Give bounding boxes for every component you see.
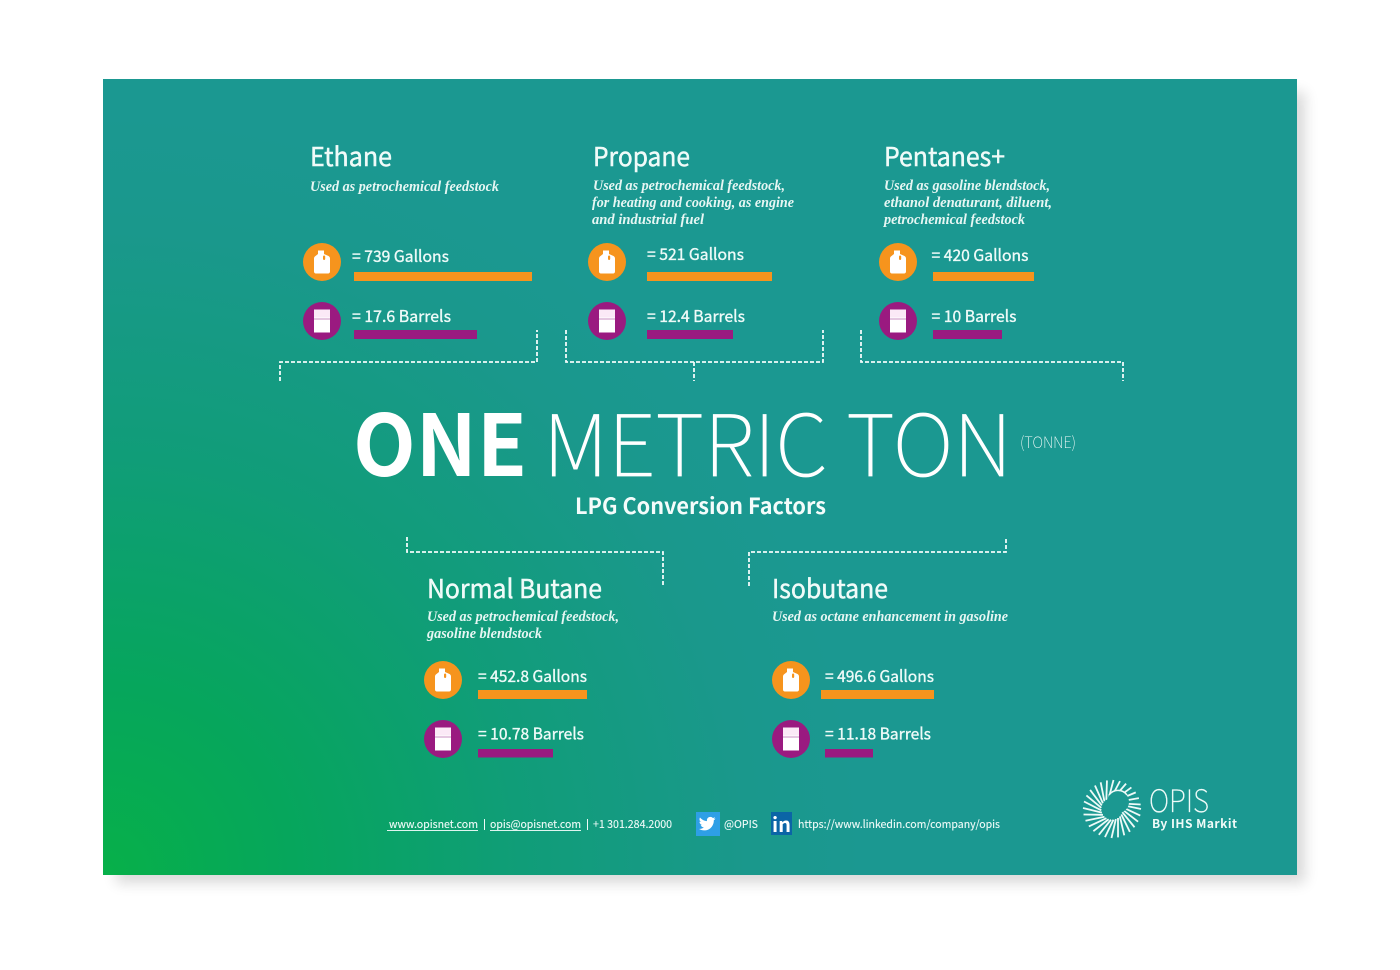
description: Propane: and industrial fuel <box>592 212 704 228</box>
description: Propane: for heating and cooking, as engine <box>592 195 795 211</box>
title: (TONNE) <box>1020 429 1076 453</box>
footer: contact details: www.opisnet.com <box>389 816 478 832</box>
panel: Ethane <box>303 137 532 340</box>
bar: barrels <box>478 749 553 758</box>
bar: gallons <box>354 272 532 281</box>
description: Pentanes+: ethanol denaturant, diluent, <box>884 195 1052 211</box>
description: Normal Butane: gasoline blendstock <box>426 626 543 642</box>
value: gallons: = 496.6 Gallons <box>825 663 934 687</box>
icon: barrel <box>588 302 626 340</box>
value: gallons: = 420 Gallons <box>932 242 1028 266</box>
description: Isobutane: Used as octane enhancement in gasoline <box>772 609 1009 625</box>
heading: Isobutane: Isobutane <box>772 569 888 606</box>
bar: barrels <box>933 330 1002 339</box>
title <box>353 378 1076 501</box>
value: barrels: = 12.4 Barrels <box>647 303 745 327</box>
logo: OPIS by IHS Markit <box>1083 776 1237 838</box>
heading: Normal Butane: Normal Butane <box>427 569 602 606</box>
bar: barrels <box>825 749 873 758</box>
title: ONE <box>353 378 527 501</box>
bracket: upper connectors <box>280 330 1123 381</box>
text: linkedin url: https://www.linkedin.com/company/opis <box>798 816 1000 832</box>
icon: barrel <box>879 302 917 340</box>
bar: gallons <box>478 690 587 699</box>
bracket: lower connectors <box>407 537 1006 586</box>
panel: Normal Butane <box>424 569 619 758</box>
value: gallons: = 452.8 Gallons <box>478 663 587 687</box>
heading: Ethane: Ethane <box>310 137 392 174</box>
bar: barrels <box>647 330 733 339</box>
icon: linkedin: in <box>772 809 791 838</box>
panel: Propane <box>588 137 795 340</box>
value: gallons: = 739 Gallons <box>352 243 449 267</box>
panel shadow <box>116 92 1305 883</box>
logo text: OPIS: OPIS <box>1149 776 1209 821</box>
icon: gallon jug <box>879 243 917 281</box>
value: barrels: = 10 Barrels <box>932 303 1016 327</box>
footer: contact details: +1 301.284.2000 <box>593 816 672 832</box>
value: gallons: = 521 Gallons <box>647 241 744 265</box>
description: Normal Butane: Used as petrochemical feedstock, <box>427 609 619 625</box>
logo mark: sunburst <box>1083 780 1141 838</box>
heading: Pentanes+: Pentanes+ <box>884 137 1005 174</box>
description: Pentanes+ <box>882 178 1052 228</box>
icon: gallon jug <box>424 661 462 699</box>
icon: barrel <box>424 720 462 758</box>
logo text: By IHS Markit: By IHS Markit <box>1152 815 1237 832</box>
bar: gallons <box>647 272 772 281</box>
text: twitter handle: @OPIS <box>724 816 758 832</box>
bar: barrels <box>354 330 477 339</box>
icon: barrel <box>772 720 810 758</box>
description: Propane: Used as petrochemical feedstock, <box>593 178 785 194</box>
title: METRIC TON <box>543 378 1012 501</box>
subtitle: LPG Conversion Factors <box>575 489 826 521</box>
footer: contact details: opis@opisnet.com <box>490 816 581 832</box>
value: barrels: = 17.6 Barrels <box>352 303 451 327</box>
panel: Isobutane <box>772 569 1009 758</box>
description: Ethane: Used as petrochemical feedstock <box>310 179 500 195</box>
icon: twitter <box>696 812 720 836</box>
bar: gallons <box>933 272 1034 281</box>
icon: gallon jug <box>588 243 626 281</box>
description: Propane <box>592 178 795 228</box>
description: Normal Butane <box>426 609 619 642</box>
footer: contact details <box>387 816 672 832</box>
value: barrels: = 11.18 Barrels <box>825 720 931 744</box>
description: Pentanes+: petrochemical feedstock <box>882 212 1026 228</box>
panel: Pentanes+ <box>879 137 1052 340</box>
description: Pentanes+: Used as gasoline blendstock, <box>884 178 1050 194</box>
icon: barrel <box>303 302 341 340</box>
icon: gallon jug <box>772 661 810 699</box>
bar: gallons <box>821 690 934 699</box>
background panel <box>103 79 1297 875</box>
value: barrels: = 10.78 Barrels <box>478 720 584 744</box>
heading: Propane: Propane <box>593 137 690 174</box>
icon: gallon jug <box>303 243 341 281</box>
